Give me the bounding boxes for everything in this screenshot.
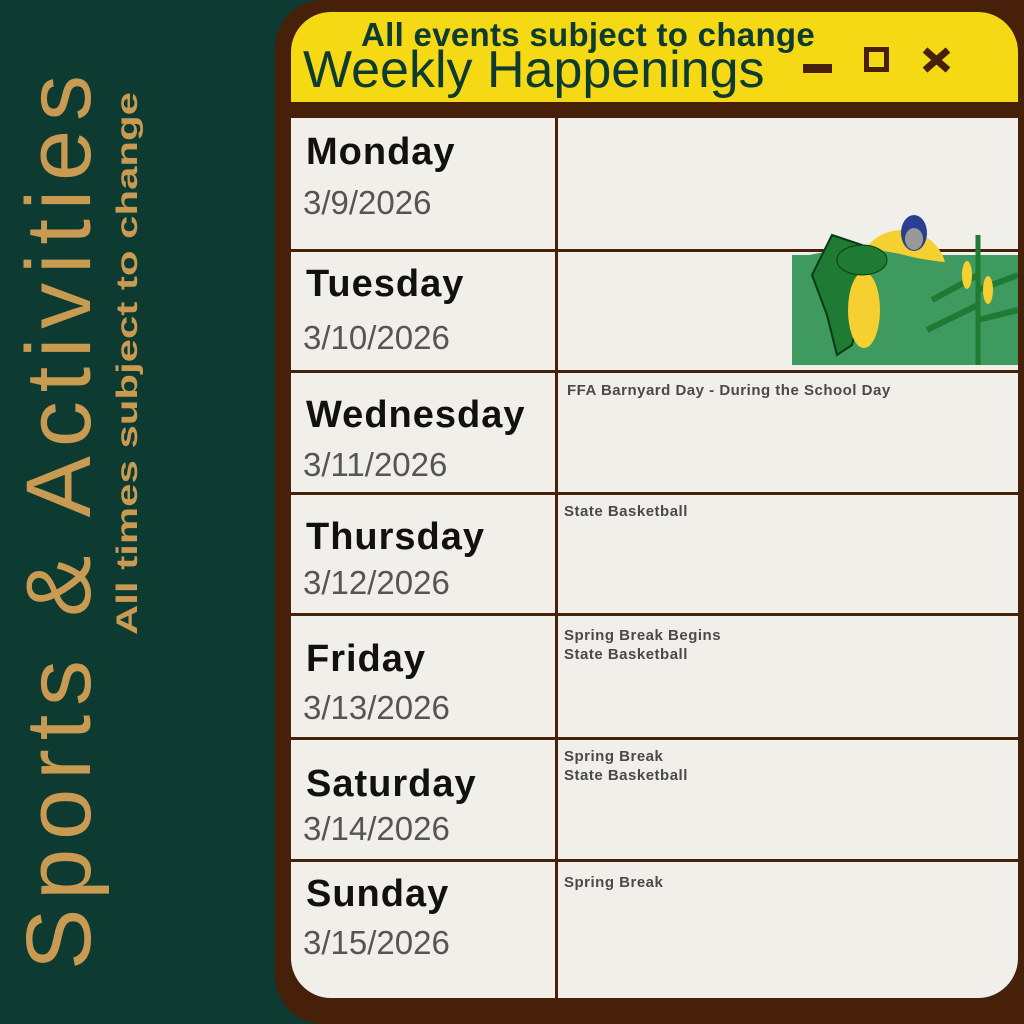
row: Sunday: [303, 873, 450, 961]
row: Monday: [303, 131, 456, 221]
event: Saturday: Spring Break: [564, 748, 663, 765]
row: Tuesday: 3/10/2026: [303, 319, 450, 356]
row: Saturday: [303, 763, 477, 847]
row: Monday: 3/9/2026: [303, 184, 431, 221]
event: Wednesday: FFA Barnyard Day - During the School Day: [567, 382, 891, 399]
row: Sunday: Sunday: [306, 873, 449, 915]
schedule table: [291, 118, 1018, 998]
row: Wednesday: Wednesday: [306, 394, 525, 436]
row: Tuesday: Tuesday: [306, 263, 464, 305]
row: Saturday: 3/14/2026: [303, 810, 450, 847]
row: Friday: 3/13/2026: [303, 689, 450, 726]
event: Thursday: State Basketball: [564, 503, 688, 520]
event: Friday: State Basketball: [564, 646, 688, 663]
title: Sports & Activities: Sports & Activities: [8, 75, 110, 970]
column divider: [555, 118, 558, 998]
row: Wednesday: 3/11/2026: [303, 446, 447, 483]
side title: [8, 75, 144, 970]
icon: minimize: [803, 64, 832, 73]
row: Thursday: 3/12/2026: [303, 564, 450, 601]
event: Saturday: [564, 748, 688, 784]
row: Saturday: Saturday: [306, 763, 477, 805]
row: Thursday: Thursday: [306, 516, 485, 558]
icon: close: [922, 47, 950, 73]
header bar: [291, 12, 1018, 102]
mascot illustration: [792, 215, 1018, 365]
row: Friday: Friday: [306, 638, 426, 680]
subtitle: All times subject to change: [111, 92, 144, 635]
row: Tuesday: [303, 263, 464, 356]
header note: All events subject to change: [361, 16, 815, 53]
row: Friday: [303, 638, 450, 726]
row: Wednesday: [303, 394, 525, 483]
event: Sunday: Spring Break: [564, 874, 663, 891]
window frame: [275, 0, 1024, 1024]
event: Friday: [564, 627, 721, 663]
row: Monday: Monday: [306, 131, 456, 173]
row: Thursday: [303, 516, 485, 601]
event: Friday: Spring Break Begins: [564, 627, 721, 644]
heading: Weekly Happenings: [303, 41, 765, 99]
row: Sunday: 3/15/2026: [303, 924, 450, 961]
event: Saturday: State Basketball: [564, 767, 688, 784]
icon: maximize: [864, 47, 889, 72]
